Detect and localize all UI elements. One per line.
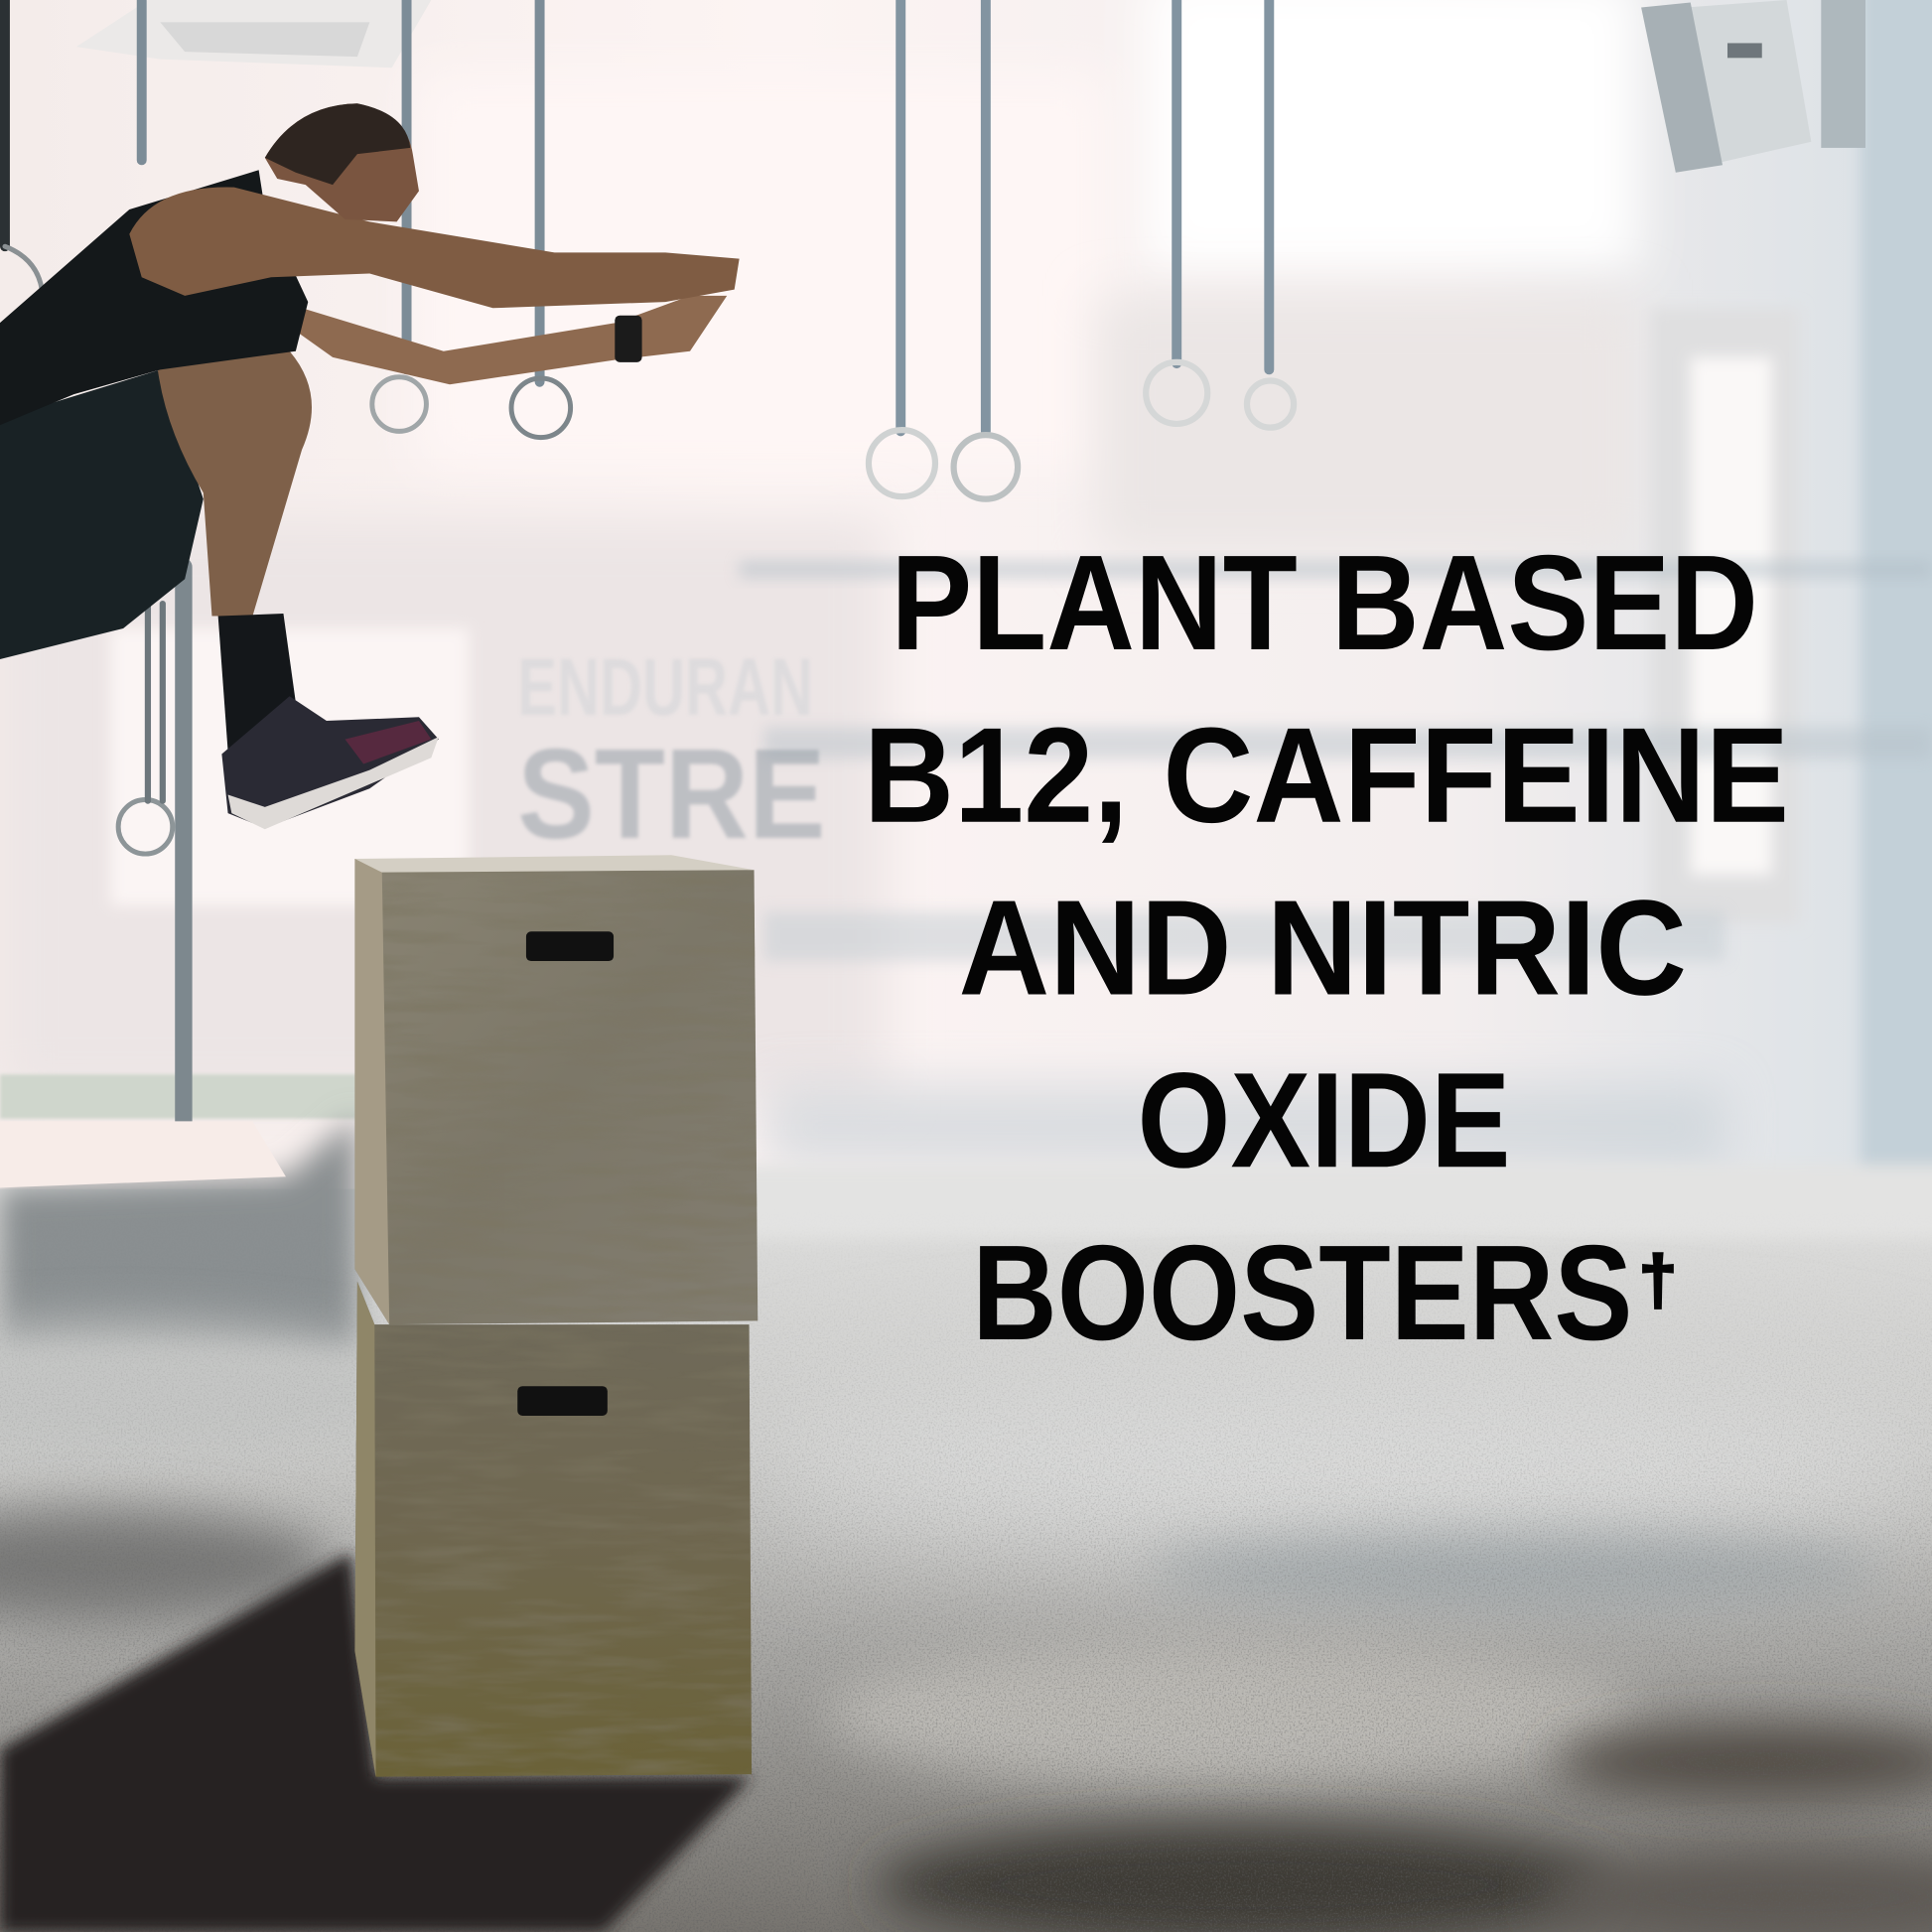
background wall lettering: ENDURAN	[517, 642, 813, 733]
hanging gymnastic rings	[5, 0, 1294, 1121]
lower arm	[298, 296, 727, 384]
line 1: PLANT BASED	[891, 526, 1758, 678]
upper arm and shoulder	[129, 188, 740, 308]
background wall lettering: STRE	[517, 723, 826, 866]
dagger mark: †	[1639, 1241, 1677, 1318]
head	[265, 103, 419, 221]
line 3: AND NITRIC	[959, 872, 1687, 1024]
torso vest	[0, 170, 308, 425]
background wall lettering	[517, 642, 826, 866]
top box	[354, 855, 763, 1330]
sock	[218, 614, 296, 752]
headline	[864, 526, 1789, 1368]
athlete jumping	[0, 103, 740, 829]
background: gym wall	[0, 0, 1932, 1244]
ceiling unit and corner speaker	[76, 0, 1865, 173]
watch	[615, 316, 642, 362]
gym floor	[0, 1115, 1932, 1932]
line 5: BOOSTERS	[972, 1216, 1632, 1368]
shorts	[0, 369, 204, 659]
shoe	[221, 696, 439, 829]
box shadow on floor	[0, 1553, 752, 1932]
back leg thigh and knee	[158, 341, 312, 617]
line 2: B12, CAFFEINE	[864, 699, 1789, 851]
bottom box	[354, 1282, 758, 1780]
line 4: OXIDE	[1138, 1043, 1511, 1195]
stacked wooden plyo boxes	[354, 855, 763, 1780]
floor grain	[0, 1298, 1932, 1932]
